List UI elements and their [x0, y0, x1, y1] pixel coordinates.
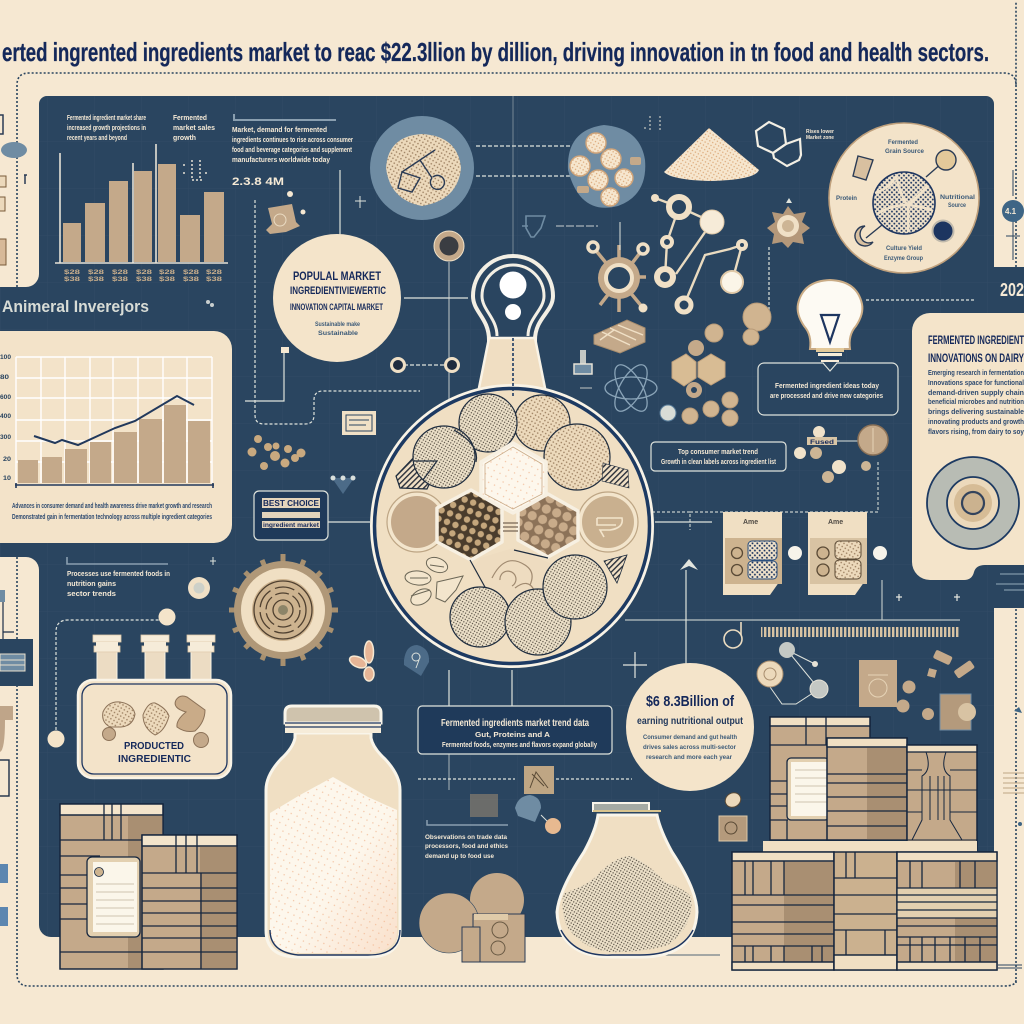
panel: ingredient tray: INGREDIENTIC: [118, 753, 191, 765]
label box: BEST CHOICE: [263, 499, 320, 508]
callout: popular market: Sustainable make: [315, 321, 360, 328]
boxes: left stack: [60, 804, 237, 969]
panel: right text: [912, 313, 1024, 580]
note: [806, 129, 835, 141]
bar chart: $38: [136, 277, 153, 283]
icon: tan balls and package: [419, 873, 525, 962]
node: [188, 577, 210, 599]
sparkles: [623, 594, 960, 678]
bar chart: $28: [88, 270, 105, 276]
panel: line chart: 100: [0, 355, 12, 361]
panel: line chart: Advances in consumer demand and health awareness drive market growth and research: [12, 503, 212, 510]
bar chart: $28: [206, 270, 223, 276]
icon: large gear: [229, 554, 338, 666]
note: left lower text: nutrition gains: [67, 581, 116, 588]
panel: ingredient wheel: Grain Source: [885, 149, 925, 155]
icon: gear molecule: [588, 222, 648, 312]
bar chart notes: [67, 115, 215, 142]
panel: line chart: 300: [0, 435, 12, 441]
market notes: 2.3.8 4M: [232, 176, 284, 188]
market notes: ingredients continues to rise across consumer: [232, 137, 353, 144]
stippled circles upper: [396, 394, 629, 490]
panel: ingredient tray: PRODUCTED: [124, 740, 184, 752]
bar chart: [55, 144, 228, 283]
product pack: left: Ame: [743, 519, 758, 526]
callout: market value: $6 8.3Billion of: [646, 693, 735, 710]
icon: square with circle: [940, 694, 976, 730]
panel: line chart: 20: [3, 457, 12, 463]
bar chart: $28: [112, 270, 129, 276]
note: left lower text: sector trends: [67, 591, 116, 598]
icon: small beaker: [522, 216, 598, 237]
callout box: catalyst: [651, 442, 786, 471]
note: left lower text: [67, 557, 170, 598]
round jar lid: [593, 803, 661, 811]
pack dots: [788, 546, 887, 560]
icon: petals: [348, 641, 374, 681]
box label: [87, 857, 140, 937]
note: Market zone: [806, 135, 834, 141]
connector nodes: [48, 608, 176, 748]
bar chart notes: market sales: [173, 125, 215, 132]
icon: small ring: [724, 622, 742, 648]
callout box: bulb: Fermented ingredient ideas today: [775, 381, 880, 390]
cluster: dots and tag: [794, 425, 888, 483]
icon: molecule network: [651, 194, 746, 312]
connector lines: [56, 96, 975, 790]
market notes: food and beverage categories and supplement: [232, 147, 353, 154]
bar chart: $38: [112, 277, 129, 283]
callout box: center bottom: Fermented foods, enzymes and flavors expand globally: [442, 742, 597, 749]
box upper middle: [827, 738, 907, 840]
panel: ingredient wheel: Nutritional: [940, 195, 975, 201]
bar chart: $28: [183, 270, 200, 276]
callout box: center bottom: Fermented ingredients market trend data: [441, 718, 589, 729]
callout: popular market: Sustainable: [318, 330, 358, 337]
chart bars: [18, 405, 210, 483]
bar chart: $28: [64, 270, 81, 276]
callout box: catalyst: Top consumer market trend: [678, 447, 758, 456]
boxes: right stack: [732, 717, 997, 970]
icon: knot: [605, 360, 657, 416]
icon: ingredient sack: [183, 160, 366, 234]
sparkle: [210, 557, 216, 565]
bar chart: $38: [206, 277, 223, 283]
flask body ring: [370, 384, 654, 668]
bar chart: $38: [183, 277, 200, 283]
callout box: bulb: are processed and drive new categories: [770, 391, 883, 400]
bar chart notes: growth: [173, 135, 196, 142]
panel: line chart: [0, 331, 232, 543]
bar chart: $38: [64, 277, 81, 283]
icon: small gear: [767, 198, 810, 248]
market notes: [232, 114, 353, 188]
jar of powder: [266, 706, 400, 957]
panel: right text: brings delivering sustainable: [928, 409, 1024, 416]
bar chart notes: Fermented: [173, 115, 207, 122]
panel: line chart: 400: [0, 414, 12, 420]
panel: ingredient wheel: Enzyme Group: [884, 256, 923, 262]
icon: diamond: [330, 476, 356, 494]
bar chart notes: Fermented ingredient market share: [67, 115, 146, 122]
note: left lower text: Processes use fermented foods in: [67, 571, 170, 578]
note: lower text: Observations on trade data: [425, 834, 507, 841]
chart grid: [16, 357, 212, 483]
left dark label box: [0, 639, 33, 686]
icon: light bulb: [798, 280, 862, 362]
panel: line chart: Demonstrated gain in fermentation technology across multiple ingredient categories: [12, 514, 212, 521]
box upper left: [770, 717, 870, 840]
box upper label: [787, 758, 829, 820]
box front: [142, 835, 237, 969]
heading: animal innovations: Animeral Inverejors: [2, 298, 149, 316]
note: Rises lower: [806, 129, 835, 135]
round jar: [557, 803, 697, 957]
note: lower text: [425, 820, 508, 860]
icons: pieces: [896, 650, 975, 720]
callout: popular market: INGREDIENTIVIEWERTIC: [290, 285, 386, 297]
lower hexagon detail: [470, 548, 555, 607]
callout: market value: drives sales across multi-sector: [643, 744, 736, 751]
icon: small bottle: [574, 350, 592, 388]
label box: [254, 491, 328, 540]
product pack: right: Ame: [828, 519, 843, 526]
callout box: catalyst: Growth in clean labels across ingredient list: [661, 457, 776, 466]
icon: powder cone: [664, 128, 759, 181]
panel: right text: demand-driven supply chain: [928, 390, 1024, 397]
box lower middle: [834, 852, 897, 970]
product pack: left: [723, 512, 782, 595]
panel: line chart: 80: [0, 375, 10, 381]
arrow up: [680, 559, 698, 570]
callout: market value: [626, 663, 754, 791]
stippled circles lower: [450, 555, 627, 655]
wheel satellites: [853, 150, 956, 246]
shelf strip: [763, 841, 977, 852]
bar chart: $28: [159, 270, 176, 276]
icon: beads plate: [568, 125, 645, 208]
icons: stamps and blob: [470, 766, 561, 834]
panel: ingredient wheel: Fermented: [888, 140, 918, 146]
flask bulb top: [473, 256, 553, 340]
right edge dots: [1014, 707, 1022, 826]
box back: [60, 804, 163, 969]
market notes: manufacturers worldwide today: [232, 157, 330, 164]
bar chart: $28: [136, 270, 153, 276]
icon: nodes group: [757, 642, 828, 704]
callout box: center bottom: [418, 706, 612, 754]
leaves: [404, 555, 463, 609]
icon: hexagon beads: [672, 340, 725, 398]
box lower left: [732, 852, 834, 970]
box lower right: [897, 852, 997, 970]
callout: market value: Consumer demand and gut health: [643, 734, 737, 741]
bar chart notes: recent years and beyond: [67, 135, 127, 142]
test tubes: [93, 635, 215, 680]
disc: [927, 457, 1019, 549]
baseline marks: [482, 955, 775, 963]
icon: small badge: [404, 645, 429, 676]
note: lower text: processors, food and ethics: [425, 843, 508, 850]
box upper right: [907, 745, 977, 850]
jar lid: [285, 706, 381, 733]
flask: central illustration: [370, 256, 654, 668]
product pack: right: [808, 512, 867, 595]
icons: seeds: [660, 303, 771, 426]
right edge badge: 4.1: [1005, 207, 1017, 216]
bar chart: $38: [159, 277, 176, 283]
tray ingredients: [102, 696, 208, 748]
cluster: dots and tag: Fused: [810, 440, 834, 446]
chart line: [34, 396, 194, 445]
icon: document: [342, 411, 376, 435]
icon: hexagon molecule: [756, 122, 801, 166]
node: knob: [434, 231, 464, 261]
callout: popular market: INNOVATION CAPITAL MARKET: [290, 302, 383, 313]
panel: ingredient wheel: Protein: [836, 196, 857, 202]
barcode strip: [761, 627, 959, 637]
globe: [873, 172, 935, 234]
note: lower text: demand up to food use: [425, 853, 494, 860]
nodes: connector dots: [392, 358, 458, 372]
callout box: bulb: [758, 363, 898, 415]
hexagons: [437, 443, 578, 560]
icon: wood block: [594, 320, 645, 353]
callout: market value: research and more each year: [646, 754, 732, 761]
panel: ingredient wheel: [829, 123, 979, 273]
tan circles: [387, 492, 638, 552]
flask neck: [477, 338, 547, 398]
callout: popular market: [273, 234, 401, 362]
label box: ingredient market: [263, 522, 320, 529]
icon: beans: [248, 435, 306, 470]
dots: [206, 300, 214, 307]
panel: line chart: 600: [0, 395, 12, 401]
bar chart: $38: [88, 277, 105, 283]
icon: tan square stamp: [859, 660, 897, 707]
panel: ingredient wheel: Culture Yield: [886, 246, 922, 252]
right edge badge: [1002, 170, 1024, 260]
callout: market value: earning nutritional output: [637, 716, 744, 727]
panel: line chart: 10: [3, 476, 12, 482]
arrow head: [281, 347, 289, 353]
callout box: center bottom: Gut, Proteins and A: [475, 732, 550, 739]
panel: ingredient tray: [78, 680, 231, 778]
market notes: Market, demand for fermented: [232, 127, 327, 134]
icon: grain plate: [370, 116, 474, 220]
panel: ingredient wheel: Source: [948, 203, 967, 209]
callout: popular market: POPULAL MARKET: [293, 271, 381, 283]
icons: small ring and tile: [719, 790, 747, 841]
left edge fragments: [0, 115, 33, 926]
bar chart notes: increased growth projections in: [67, 125, 146, 132]
right edge marks: [998, 773, 1024, 968]
